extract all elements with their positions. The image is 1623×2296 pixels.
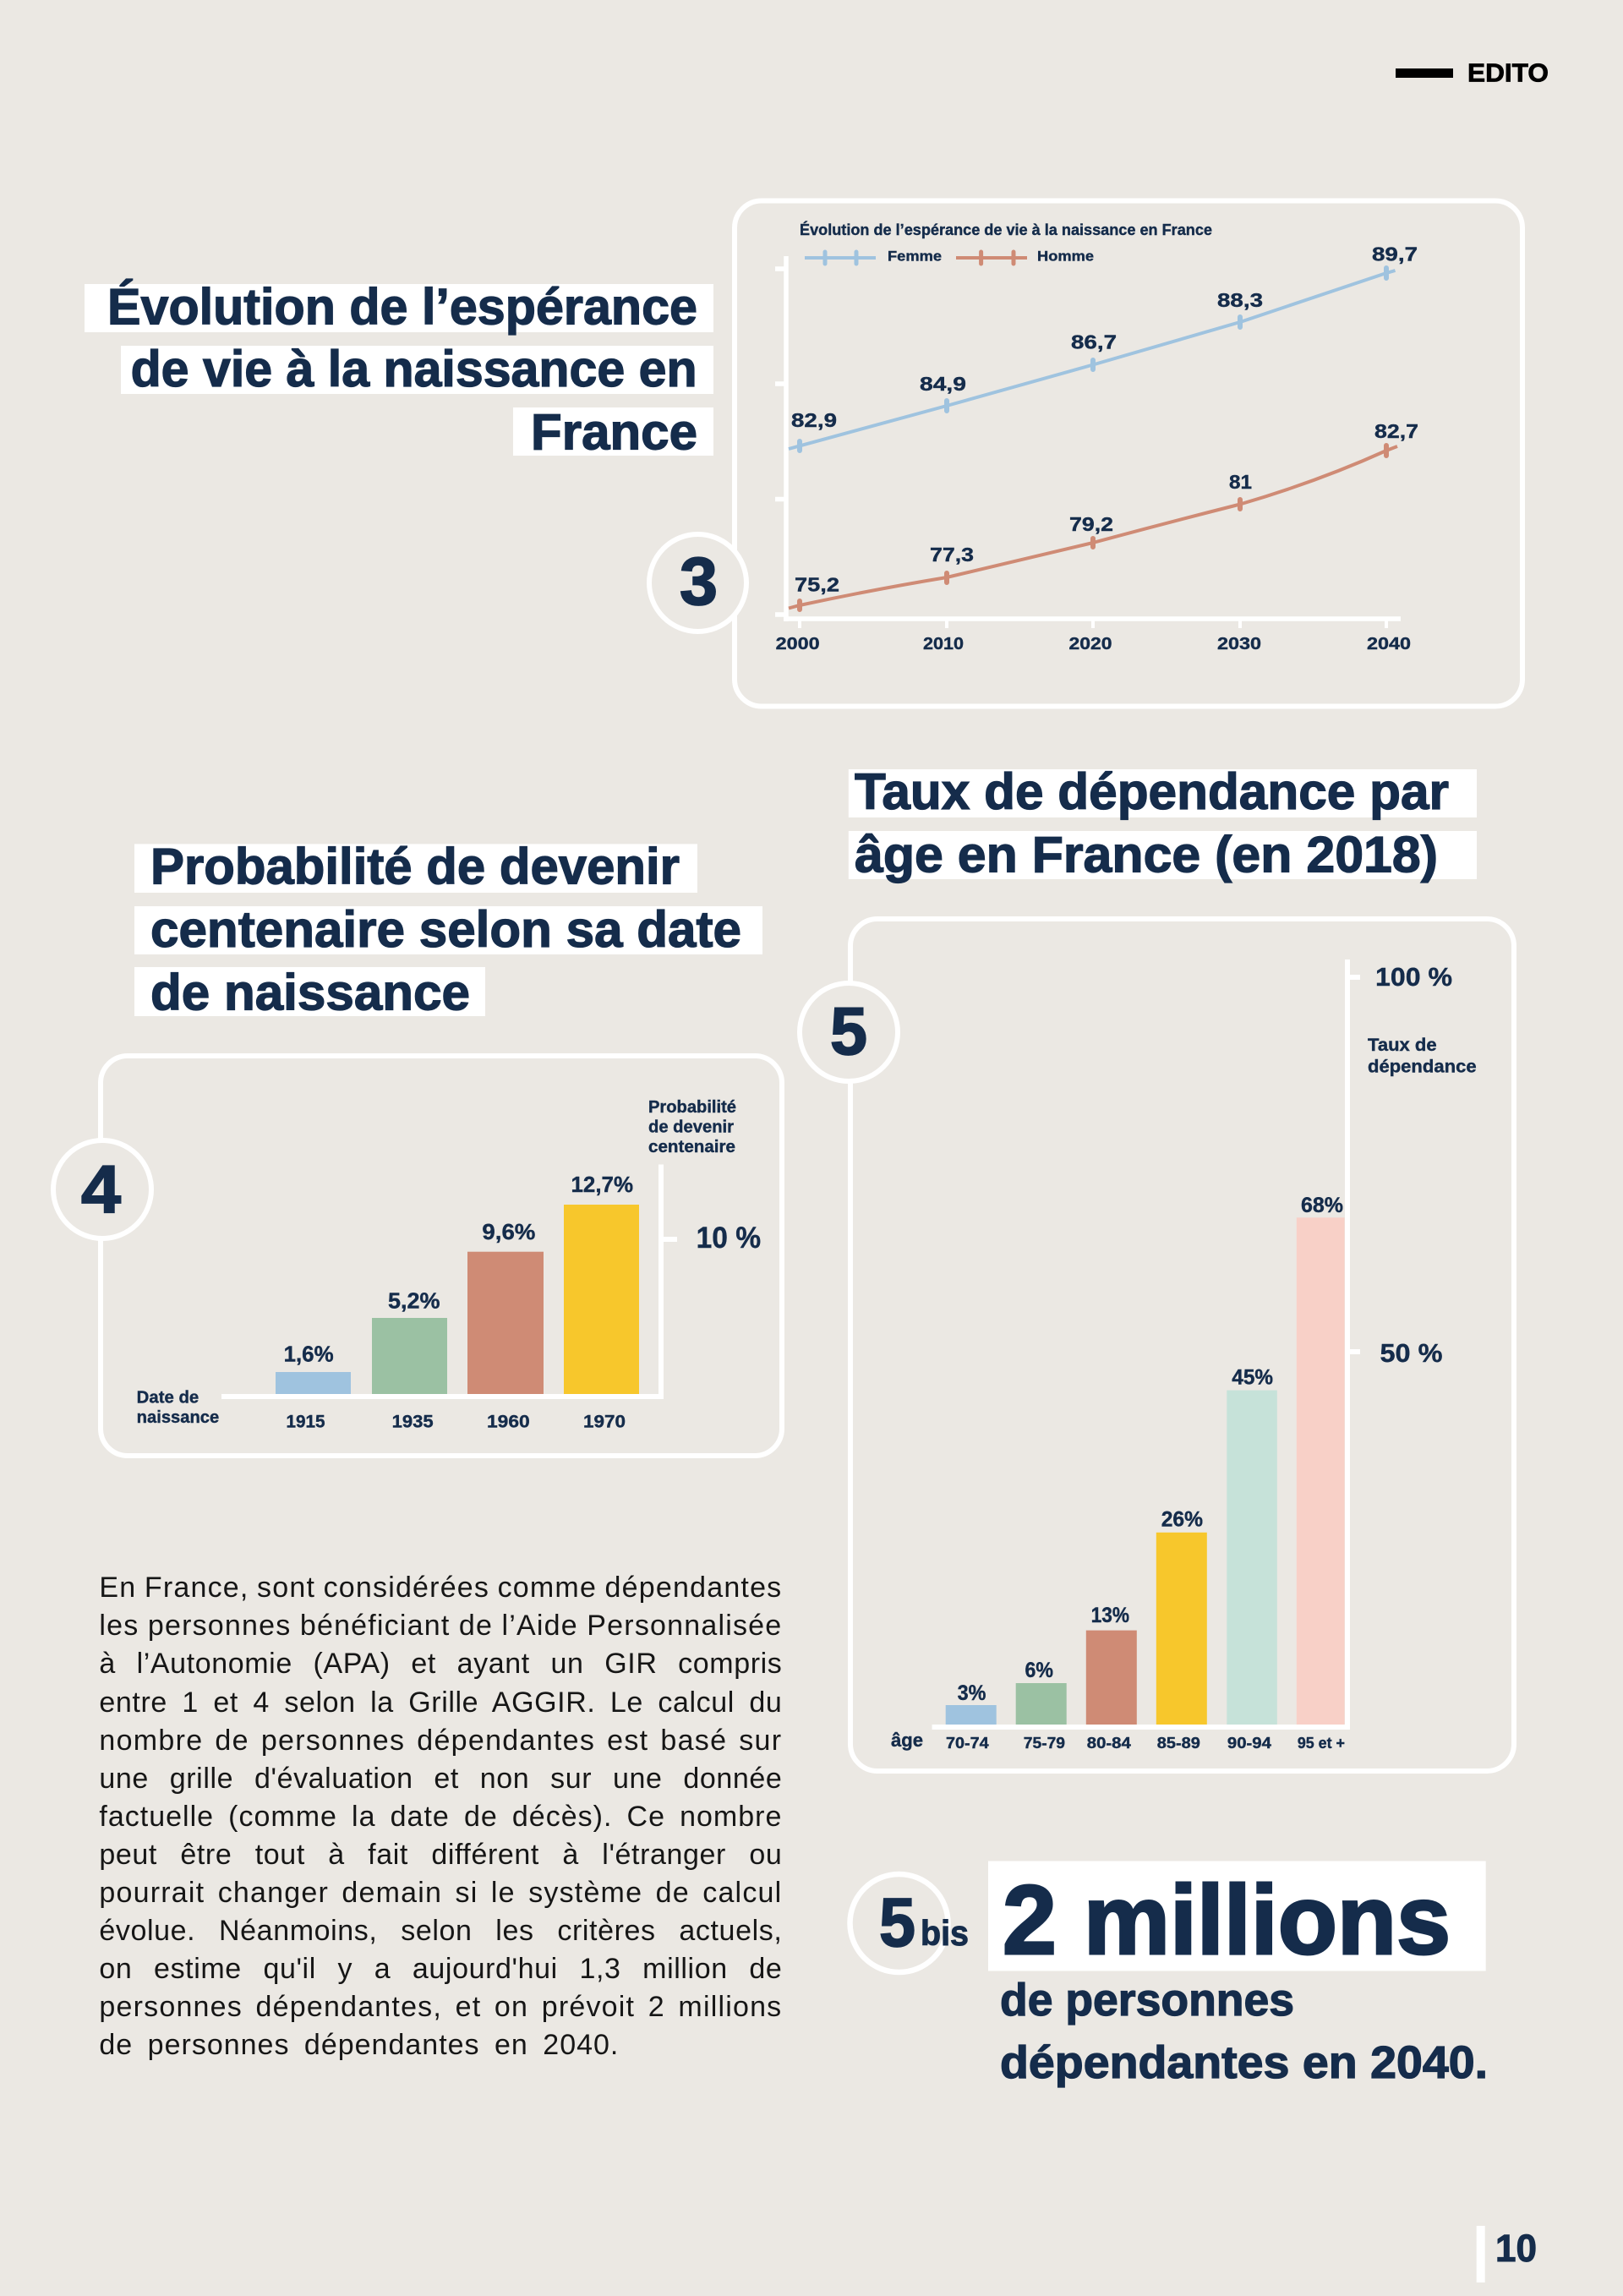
- header: EDITO: [1396, 58, 1549, 88]
- y axis label: Probabilité: [648, 1098, 736, 1117]
- text block: definition: nombre de personnes dépendantes est basé sur: [99, 1725, 782, 1757]
- text block: definition: peut être tout à fait différent à l'étranger ou: [99, 1839, 782, 1871]
- page number: [1477, 2226, 1537, 2282]
- values: Femme: 82,9: [791, 409, 837, 431]
- bars: [276, 1205, 639, 1395]
- text block: definition: personnes dépendantes, et on prévoit 2 millions: [99, 1991, 782, 2023]
- bars: [946, 1217, 1345, 1725]
- heading: taux de dépendance: [849, 763, 1477, 883]
- badge 3: 3: [680, 544, 718, 619]
- line: Homme: [789, 446, 1397, 610]
- text block: definition: les personnes bénéficiant de l’Aide Personnalisée: [99, 1610, 782, 1642]
- heading: probabilité centenaire: centenaire selon sa date: [150, 901, 741, 958]
- x axis years: 2020: [1068, 635, 1112, 653]
- text block: definition: pourrait changer demain si le système de calcul: [99, 1877, 782, 1909]
- x axis labels: [137, 1389, 626, 1432]
- y axis label: de devenir: [648, 1118, 734, 1137]
- panel 3: life expectancy chart: [735, 201, 1522, 707]
- x axis labels: 1970: [583, 1413, 626, 1432]
- text block: definition: évolue. Néanmoins, selon les critères actuels,: [99, 1915, 782, 1947]
- heading: taux de dépendance: Taux de dépendance par: [855, 763, 1449, 820]
- page number: 10: [1495, 2227, 1537, 2270]
- legend: [805, 249, 1094, 265]
- callout: 2 millions: de personnes: [1000, 1975, 1294, 2025]
- x axis labels: 85-89: [1157, 1735, 1200, 1752]
- heading: taux de dépendance: âge en France (en 2018): [855, 827, 1438, 883]
- x axis years: 2030: [1217, 635, 1261, 653]
- value labels: 26%: [1161, 1508, 1203, 1532]
- x axis labels: Date de: [137, 1389, 199, 1408]
- y axis labels: [1368, 962, 1477, 1368]
- y axis labels: Taux de: [1368, 1036, 1437, 1055]
- values: Homme: [795, 420, 1418, 596]
- axes: [221, 1165, 677, 1399]
- text block: definition: En France, sont considérées comme dépendantes: [99, 1572, 782, 1604]
- y axis labels: 100 %: [1375, 962, 1452, 992]
- axes: [775, 256, 1401, 628]
- heading: probabilité centenaire: de naissance: [150, 964, 470, 1021]
- badge 5: [800, 983, 898, 1081]
- x axis labels: 75-79: [1024, 1735, 1065, 1752]
- panel 4: centenarian bar chart: [101, 1056, 782, 1456]
- values: Homme: 82,7: [1374, 420, 1418, 442]
- value labels: [958, 1194, 1343, 1705]
- value labels: 12,7%: [571, 1172, 633, 1197]
- y axis label: [648, 1098, 761, 1255]
- values: Homme: 79,2: [1069, 513, 1113, 535]
- values: Femme: [791, 243, 1418, 431]
- x axis labels: âge: [891, 1730, 923, 1751]
- value labels: [284, 1172, 633, 1367]
- x axis labels: 70-74: [946, 1735, 989, 1752]
- badge 3: [649, 534, 746, 631]
- y axis labels: dépendance: [1368, 1058, 1477, 1077]
- value labels: 5,2%: [388, 1288, 440, 1314]
- y axis label: centenaire: [648, 1138, 735, 1156]
- legend: Homme: [1037, 249, 1094, 265]
- x axis labels: 1960: [487, 1413, 530, 1432]
- x axis labels: 90-94: [1227, 1735, 1271, 1752]
- heading: espérance de vie: Évolution de l’espérance: [107, 278, 697, 335]
- callout: 2 millions: [988, 1861, 1488, 2088]
- x axis years: [776, 635, 1411, 653]
- y axis labels: 50 %: [1380, 1338, 1442, 1368]
- x axis labels: 80-84: [1087, 1735, 1131, 1752]
- text block: definition: factuelle (comme la date de décès). Ce nombre: [99, 1801, 782, 1833]
- badge 5 bis: 5: [879, 1884, 915, 1961]
- heading: espérance de vie: [85, 278, 713, 460]
- badge 5 bis: bis: [921, 1913, 969, 1953]
- value labels: 45%: [1232, 1366, 1273, 1390]
- value labels: 6%: [1025, 1659, 1053, 1682]
- values: Femme: 88,3: [1217, 289, 1263, 311]
- value labels: 68%: [1301, 1194, 1343, 1217]
- x axis labels: naissance: [137, 1408, 219, 1427]
- heading: espérance de vie: France: [531, 404, 697, 460]
- x axis years: 2000: [776, 635, 820, 653]
- text block: definition: [99, 1572, 782, 2061]
- badge 5 bis: [850, 1874, 969, 1972]
- values: Femme: 89,7: [1372, 243, 1418, 265]
- text block: definition: de personnes dépendantes en 2040.: [99, 2029, 619, 2061]
- badge 4: [53, 1140, 151, 1238]
- heading: espérance de vie: de vie à la naissance en: [131, 341, 697, 397]
- x axis labels: 1915: [286, 1413, 325, 1432]
- callout: 2 millions: dépendantes en 2040.: [1000, 2037, 1488, 2088]
- x axis labels: 1935: [392, 1413, 434, 1432]
- values: Homme: 75,2: [795, 574, 839, 596]
- heading: probabilité centenaire: [134, 839, 762, 1021]
- x axis labels: [891, 1730, 1345, 1752]
- badge 5: 5: [830, 993, 867, 1069]
- text block: definition: à l’Autonomie (APA) et ayant un GIR compris: [99, 1648, 782, 1680]
- legend: Femme: [888, 249, 942, 265]
- axes: [932, 959, 1360, 1730]
- value labels: 13%: [1091, 1604, 1129, 1627]
- x axis years: 2040: [1367, 635, 1411, 653]
- panel 5: dependency bar chart: [850, 919, 1514, 1771]
- value labels: 1,6%: [284, 1342, 334, 1367]
- callout: 2 millions: 2 millions: [1003, 1865, 1451, 1975]
- value labels: 9,6%: [482, 1219, 535, 1244]
- line: Femme: [789, 268, 1395, 451]
- header: EDITO: EDITO: [1467, 58, 1549, 88]
- text block: definition: on estime qu'il y a aujourd'hui 1,3 million de: [99, 1953, 782, 1985]
- values: Homme: 77,3: [930, 544, 974, 566]
- y axis label: 10 %: [697, 1222, 761, 1255]
- text block: definition: entre 1 et 4 selon la Grille AGGIR. Le calcul du: [99, 1686, 782, 1719]
- heading: probabilité centenaire: Probabilité de devenir: [150, 839, 680, 894]
- text block: definition: une grille d'évaluation et non sur une donnée: [99, 1763, 782, 1795]
- values: Femme: 86,7: [1071, 331, 1117, 353]
- badge 4: 4: [81, 1151, 122, 1227]
- value labels: 3%: [958, 1681, 986, 1705]
- values: Homme: 81: [1229, 471, 1252, 493]
- x axis labels: 95 et +: [1298, 1735, 1345, 1752]
- values: Femme: 84,9: [920, 373, 966, 395]
- chart title: Évolution de l’espérance de vie à la naissance en France: [800, 221, 1212, 238]
- x axis years: 2010: [923, 635, 964, 653]
